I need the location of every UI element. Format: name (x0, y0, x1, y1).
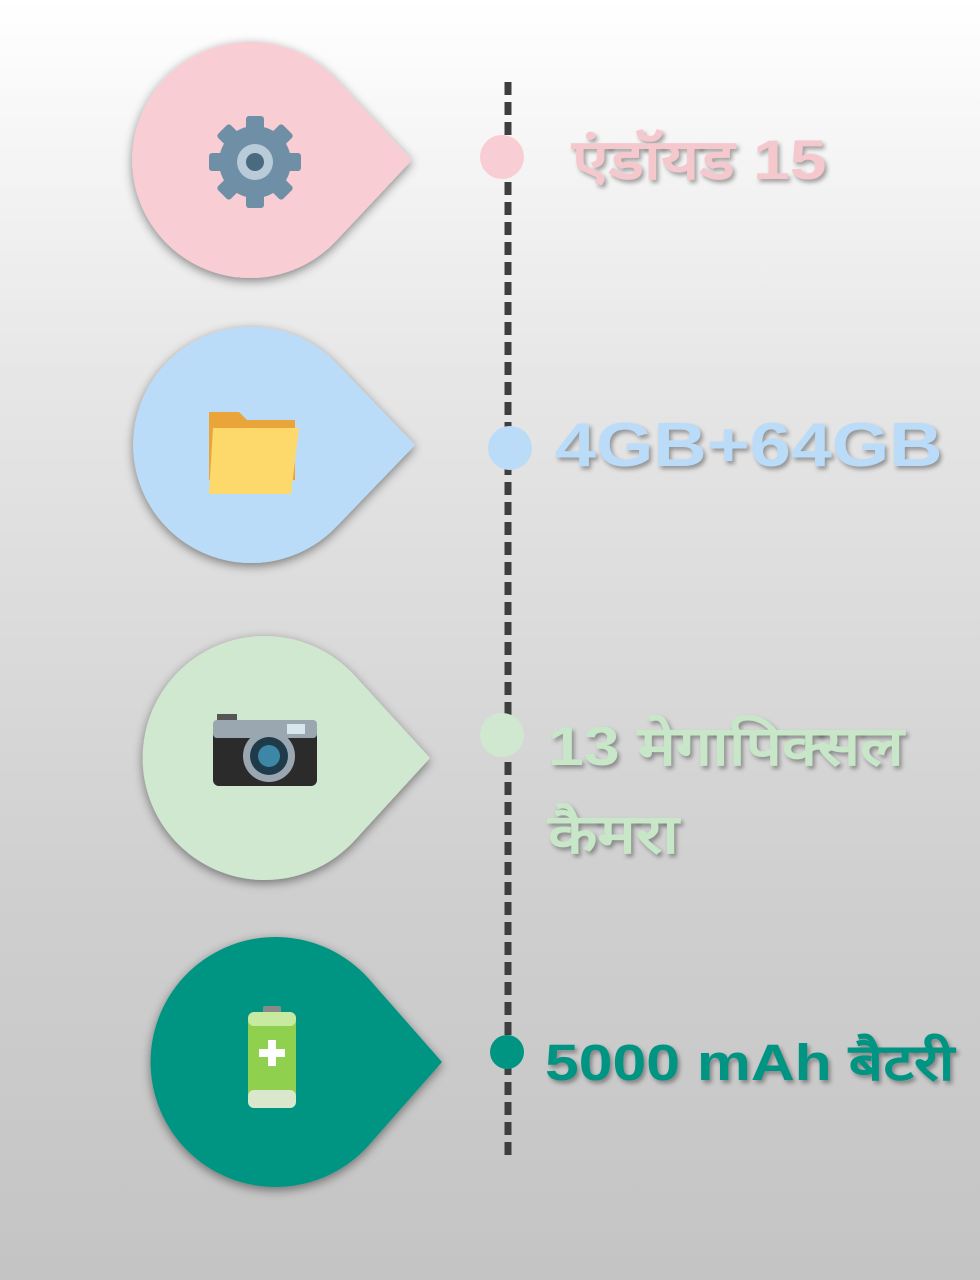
dot: android (480, 135, 524, 179)
icon: folder (209, 412, 299, 494)
teardrop: android (132, 42, 412, 278)
text: android: एंडॉयड 15 (572, 128, 827, 191)
teardrop: storage (133, 327, 415, 563)
teardrop: battery (151, 937, 442, 1187)
text: battery: 5000 mAh बैटरी (545, 1034, 954, 1091)
dot: battery (490, 1035, 524, 1069)
teardrop: camera (143, 636, 430, 880)
dot: camera (480, 713, 524, 757)
text: camera (547, 715, 910, 865)
dashed timeline line (504, 82, 512, 1155)
dot: storage (488, 426, 532, 470)
text: camera: 13 मेगापिक्सल (548, 715, 904, 777)
text: storage: 4GB+64GB (555, 411, 943, 480)
icon: camera (213, 714, 317, 786)
text: camera: कैमरा (548, 803, 679, 865)
icon: battery (248, 1006, 296, 1108)
icon: gear (209, 116, 301, 208)
